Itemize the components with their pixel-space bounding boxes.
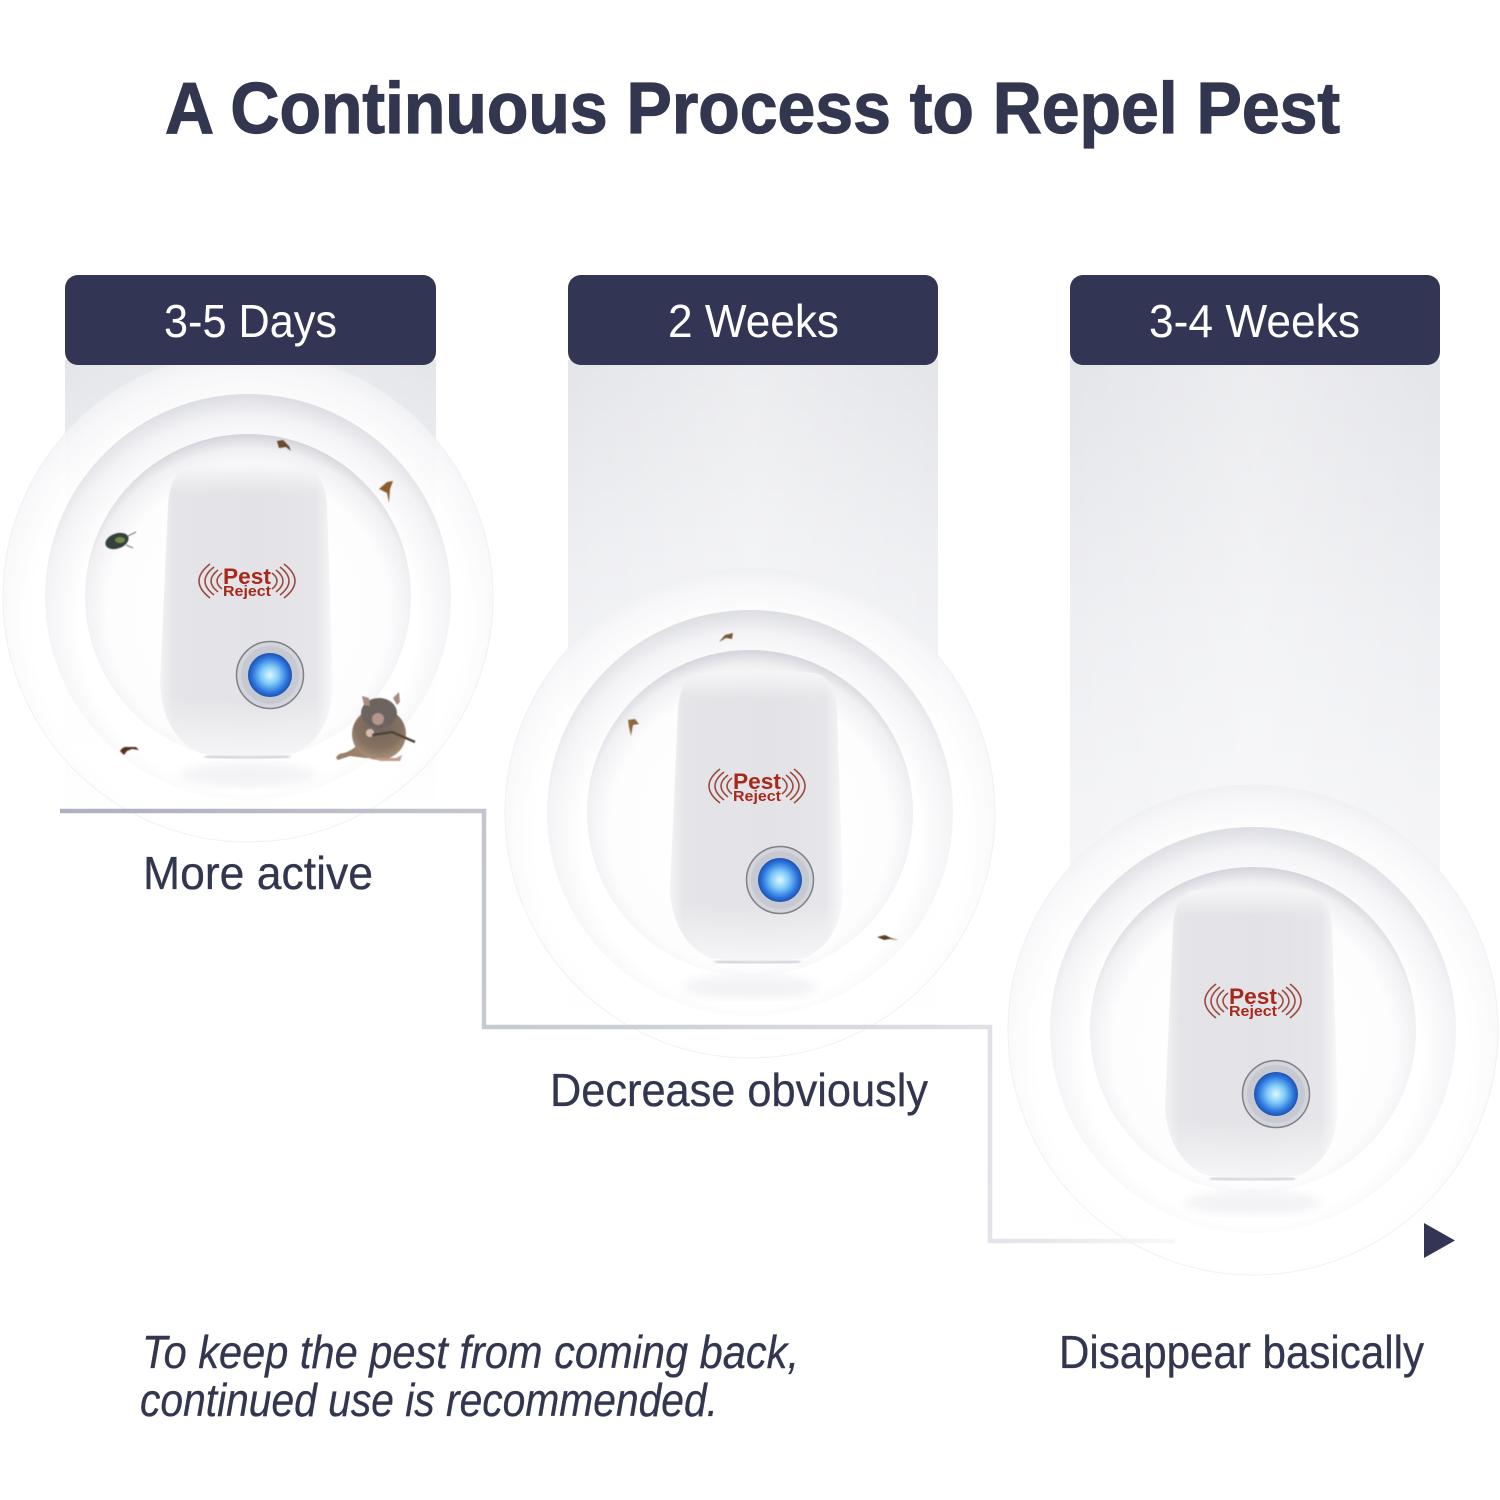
logo: Pest Reject: Reject: [1229, 1003, 1277, 1020]
logo: Pest Reject: Reject: [733, 788, 781, 805]
indicator light: [746, 846, 814, 914]
device: stage 2: [670, 670, 843, 963]
indicator light: [236, 642, 304, 708]
pest: mosquito: [379, 481, 393, 503]
device: stage 1: [160, 465, 333, 758]
pest: ant: [877, 935, 899, 940]
note: continued use: [140, 1326, 799, 1426]
ripple rings and device: stage 1: [45, 394, 451, 800]
indicator light: [1242, 1060, 1310, 1128]
pest: fly: [277, 440, 291, 451]
header: 2 Weeks: [568, 275, 938, 365]
panel backdrop: 2 weeks: [568, 360, 938, 1020]
logo: Pest Reject: Pest: [733, 769, 782, 794]
pest: mosquito: [628, 719, 639, 736]
logo: Pest Reject: Pest: [1229, 984, 1278, 1009]
logo: Pest Reject: Reject: [223, 583, 271, 600]
ripple rings and device: stage 3: [1050, 827, 1456, 1233]
panel backdrop: 3-4 weeks: [1070, 360, 1440, 1240]
label: Disappear basically: Disappear basically: [1059, 1326, 1424, 1378]
header: 3-5 Days: [65, 275, 436, 365]
stepped timeline line: [60, 811, 1175, 1241]
logo: Pest Reject: [1205, 984, 1301, 1020]
pest: ant: [120, 747, 139, 755]
pest: beetle: [103, 530, 136, 552]
device: stage 3: [1165, 887, 1338, 1180]
pest: rat: [336, 692, 415, 761]
note: continued use: To keep the pest from coming back,: [142, 1326, 799, 1378]
arrowhead: [1424, 1223, 1455, 1258]
panel backdrop: 3-5 days: [65, 360, 436, 810]
label: Decrease obviously: Decrease obviously: [550, 1064, 928, 1116]
note: continued use: continued use is recommended.: [140, 1374, 718, 1426]
ripple rings and device: stage 2: [547, 610, 953, 1016]
logo: Pest Reject: [709, 769, 805, 805]
header: 3-5 Days: 3-5 Days: [164, 295, 337, 347]
logo: Pest Reject: [199, 564, 295, 600]
header: 2 Weeks: 2 Weeks: [668, 295, 839, 347]
header: 3-4 Weeks: 3-4 Weeks: [1149, 295, 1360, 347]
logo: Pest Reject: Pest: [223, 564, 272, 589]
header: 3-4 Weeks: [1070, 275, 1440, 365]
title: A Continuous Process to Repel Pest: [165, 69, 1340, 149]
label: More active: More active: [143, 847, 373, 899]
pest: mosquito: [719, 633, 733, 642]
outer ripple rings: [3, 352, 1498, 1275]
